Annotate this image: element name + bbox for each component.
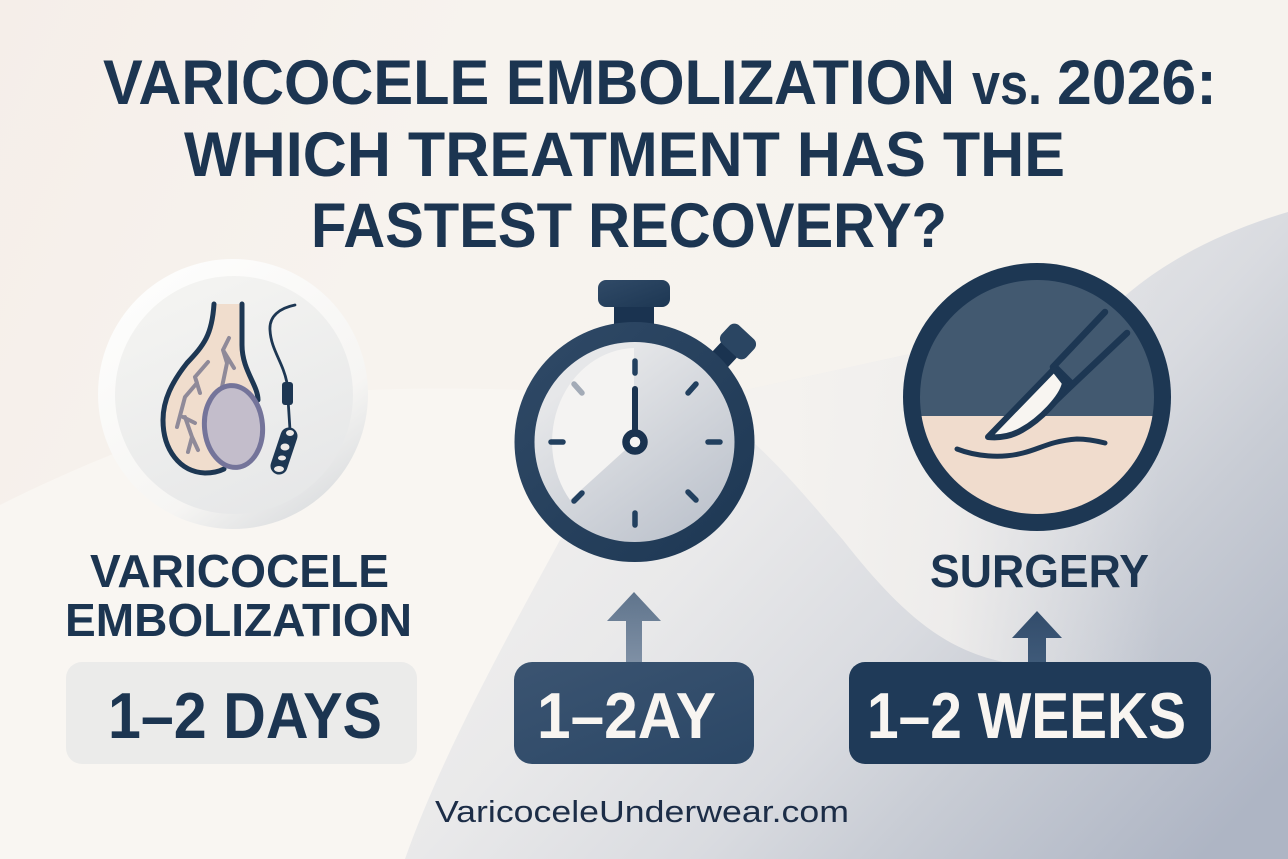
title: FASTEST RECOVERY? — [311, 191, 947, 261]
tick marks — [551, 361, 720, 525]
side button — [710, 321, 759, 369]
pill: stopwatch time — [514, 662, 754, 764]
pill: embolization time — [66, 662, 417, 764]
light wedge on dial — [552, 348, 634, 500]
title: WHICH TREATMENT HAS THE — [184, 120, 1065, 190]
icon: scrotum anatomy — [163, 304, 266, 473]
icon: catheter coil — [270, 305, 295, 472]
scalpel — [988, 312, 1127, 437]
title: vs. — [972, 52, 1042, 117]
icon: stopwatch — [514, 280, 759, 562]
arrow: center — [607, 592, 661, 663]
label: varicocele embolization: VARICOCELE — [90, 545, 389, 597]
website footer: VaricoceleUnderwear.com — [435, 794, 849, 829]
label: varicocele embolization — [65, 545, 412, 646]
label: surgery: SURGERY — [930, 545, 1149, 597]
icon: varicocele embolization disc — [98, 259, 368, 529]
title: VARICOCELE EMBOLIZATION — [103, 48, 955, 118]
label: varicocele embolization: EMBOLIZATION — [65, 594, 412, 646]
incision line — [957, 439, 1105, 456]
crown — [598, 280, 670, 329]
arrow: right — [1012, 611, 1062, 663]
pill: surgery time: 1–2 WEEKS — [867, 679, 1186, 752]
title: 2026: — [1057, 48, 1217, 118]
icon: scalpel incision — [903, 263, 1171, 531]
pill: embolization time: 1–2 DAYS — [108, 679, 382, 752]
title — [103, 48, 1217, 261]
pill: surgery time — [849, 662, 1211, 764]
pill: stopwatch time: 1–2AY — [537, 679, 716, 752]
hands — [626, 386, 644, 451]
